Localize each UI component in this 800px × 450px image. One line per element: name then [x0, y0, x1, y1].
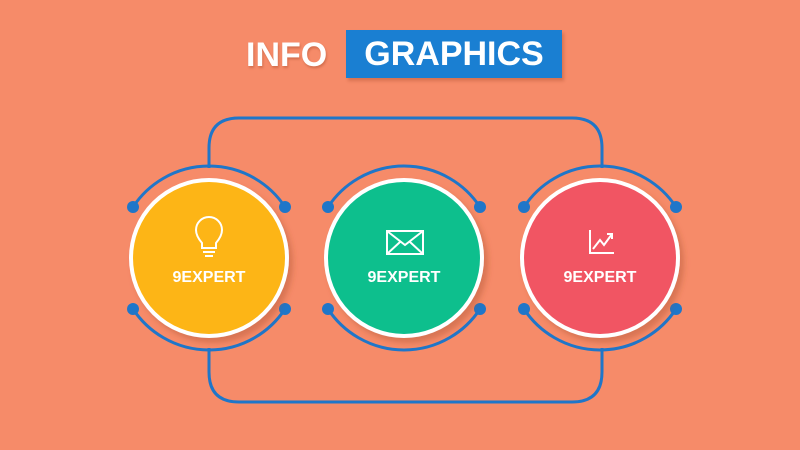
icon: chart — [590, 230, 614, 253]
title — [246, 30, 565, 82]
icon: envelope — [387, 231, 423, 254]
item 1: yellow circle: 9EXPERT — [173, 269, 246, 286]
title word box: GRAPHICS: GRAPHICS — [364, 35, 544, 73]
connector frame — [209, 118, 602, 402]
item 1: yellow circle — [127, 166, 291, 350]
item 2: green circle: 9EXPERT — [368, 269, 441, 286]
icon: light bulb — [196, 217, 222, 256]
title word box: GRAPHICS — [346, 30, 562, 78]
item 3: red circle: 9EXPERT — [564, 269, 637, 286]
item 3: red circle — [518, 166, 682, 350]
item 2: green circle — [322, 166, 486, 350]
title word: INFO: INFO — [246, 36, 327, 74]
